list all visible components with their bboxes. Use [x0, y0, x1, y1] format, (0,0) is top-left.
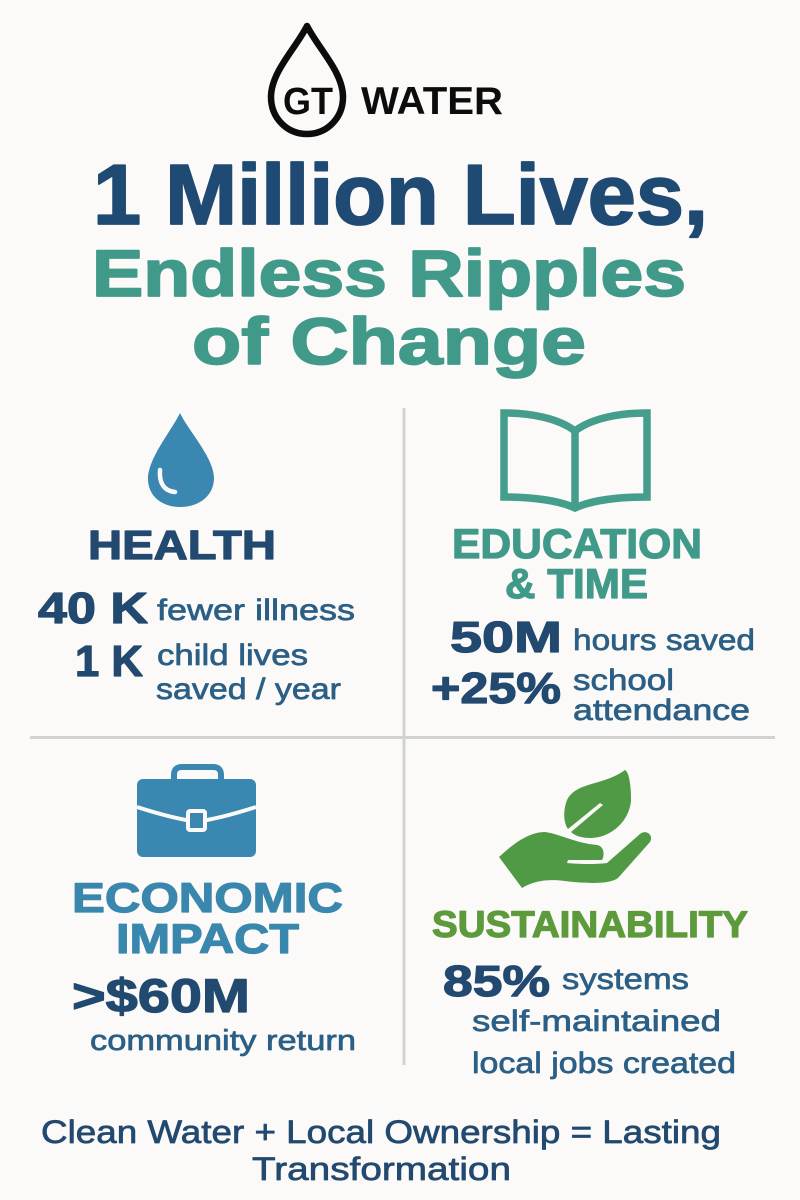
icon: briefcase	[137, 767, 256, 857]
heading: education and time	[452, 520, 702, 607]
heading: education and time: EDUCATION	[452, 520, 702, 567]
panel: sustainability	[432, 770, 748, 1080]
logo wordmark: WATER	[361, 80, 503, 123]
title line 2: Endless Ripples	[92, 236, 686, 310]
panel: economic impact	[72, 767, 356, 1057]
stat: +25% school attendance: +25%	[431, 664, 561, 713]
stat: 1K child lives saved per year: child lives	[157, 639, 308, 672]
icon: logo water drop	[271, 26, 343, 134]
logo initials: GT	[283, 81, 333, 123]
heading: health: HEALTH	[88, 522, 276, 568]
stat: 40K fewer illness	[38, 584, 355, 633]
stat: 50M hours saved	[450, 613, 755, 662]
icon: leaf in hand	[499, 770, 651, 888]
stat: 85% systems self-maintained: 85%	[443, 957, 550, 1006]
panel: education and time	[431, 413, 755, 727]
text: local jobs created: local jobs created	[472, 1047, 736, 1080]
heading: economic impact	[72, 874, 343, 962]
stat: 40K fewer illness: 40 K	[38, 584, 148, 633]
stat: +25% school attendance	[431, 664, 750, 727]
stat: 50M hours saved: 50M	[450, 613, 562, 662]
panel: health	[38, 413, 355, 706]
heading: economic impact: IMPACT	[116, 915, 299, 962]
stat: 85% systems self-maintained	[443, 957, 721, 1038]
heading: education and time: & TIME	[505, 560, 648, 607]
stat: over $60M community return: >$60M	[72, 969, 250, 1022]
stat: over $60M community return: community return	[90, 1025, 356, 1057]
stat: +25% school attendance: school	[573, 664, 674, 697]
icon: open book	[504, 413, 647, 508]
stat: 1K child lives saved per year	[75, 637, 341, 706]
stat: +25% school attendance: attendance	[573, 694, 750, 727]
footer tagline: Clean Water + Local Ownership = Lasting	[41, 1114, 721, 1150]
stat: 40K fewer illness: fewer illness	[157, 594, 355, 627]
logo: GT Water	[271, 26, 503, 134]
heading: sustainability: SUSTAINABILITY	[432, 904, 748, 945]
stat: 85% systems self-maintained: systems	[562, 963, 689, 996]
heading: economic impact: ECONOMIC	[72, 874, 343, 921]
footer tagline: Transformation	[252, 1151, 511, 1187]
stat: 85% systems self-maintained: self-maintained	[472, 1005, 721, 1038]
stat: 1K child lives saved per year: saved / year	[156, 673, 341, 706]
icon: water drop	[148, 413, 214, 507]
stat: 1K child lives saved per year: 1 K	[75, 637, 143, 686]
title line 3: of Change	[192, 304, 586, 378]
title line 1: 1 Million Lives,	[93, 148, 708, 243]
footer tagline	[41, 1114, 721, 1187]
stat: 50M hours saved: hours saved	[573, 624, 755, 657]
title	[92, 148, 708, 378]
stat: over $60M community return	[72, 969, 356, 1057]
